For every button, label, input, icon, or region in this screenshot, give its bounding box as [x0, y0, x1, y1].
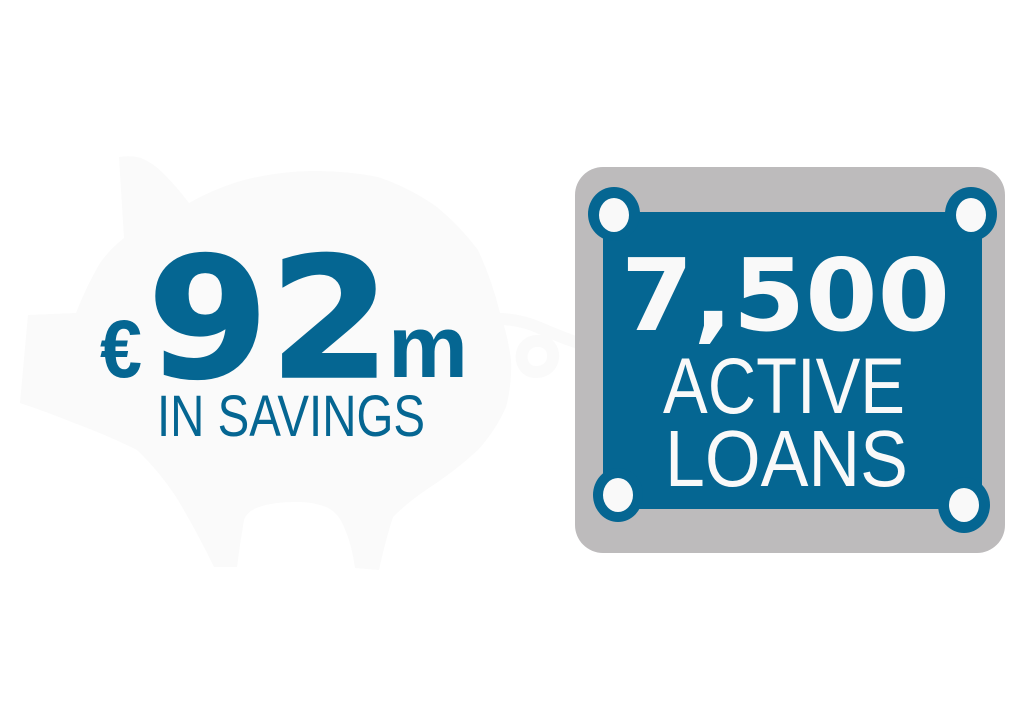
blue sign with mounting holes — [588, 187, 997, 533]
pig tail — [498, 319, 578, 372]
caption: active: ACTIVE — [663, 341, 905, 430]
active loans panel — [575, 167, 1005, 553]
caption: in savings: IN SAVINGS — [157, 384, 425, 449]
icon: pig silhouette — [20, 156, 578, 570]
euro sign: € — [100, 304, 142, 395]
unit: m: m — [388, 297, 468, 396]
caption: loans: LOANS — [665, 414, 908, 503]
grey backing plate — [575, 167, 1005, 553]
big figure: 7,500: 7,500 — [621, 237, 950, 354]
big figure: 92: 92 — [147, 221, 391, 417]
piggy bank savings panel — [20, 156, 578, 570]
